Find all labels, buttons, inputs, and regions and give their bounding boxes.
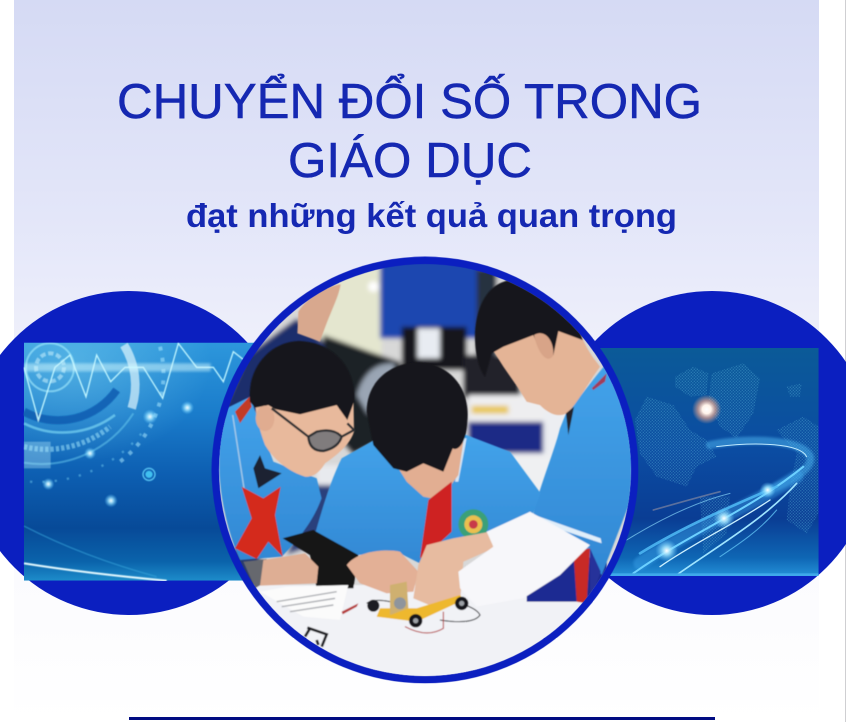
raised hand behind left boy (297, 284, 341, 342)
glows (655, 395, 776, 562)
glow points (42, 401, 194, 507)
paper on table (260, 585, 358, 620)
toy car (367, 582, 480, 633)
light swooshes (24, 526, 157, 577)
subtitle: đạt những kết quả quan trọng (186, 197, 677, 234)
left circle with technology image (0, 291, 254, 615)
glasses (272, 408, 354, 451)
heartbeat waveform (24, 343, 253, 420)
light streaks (627, 441, 810, 575)
photo background (210, 255, 640, 685)
centre circle photo of students (210, 255, 640, 685)
hud rings (24, 343, 163, 482)
left boy (219, 341, 354, 560)
dotted world map (635, 363, 819, 553)
number card (305, 628, 327, 647)
centre boy (313, 362, 541, 565)
forearms and hands (243, 512, 590, 607)
right boy (475, 280, 633, 603)
shaded gap between left and centre boys (287, 485, 333, 555)
table (243, 585, 610, 685)
title (117, 74, 702, 188)
right circle with world map image (594, 291, 846, 615)
title: GIÁO DỤC (288, 134, 532, 188)
title: CHUYỂN ĐỔI SỐ TRONG (117, 74, 702, 129)
bottom rule (129, 717, 715, 720)
